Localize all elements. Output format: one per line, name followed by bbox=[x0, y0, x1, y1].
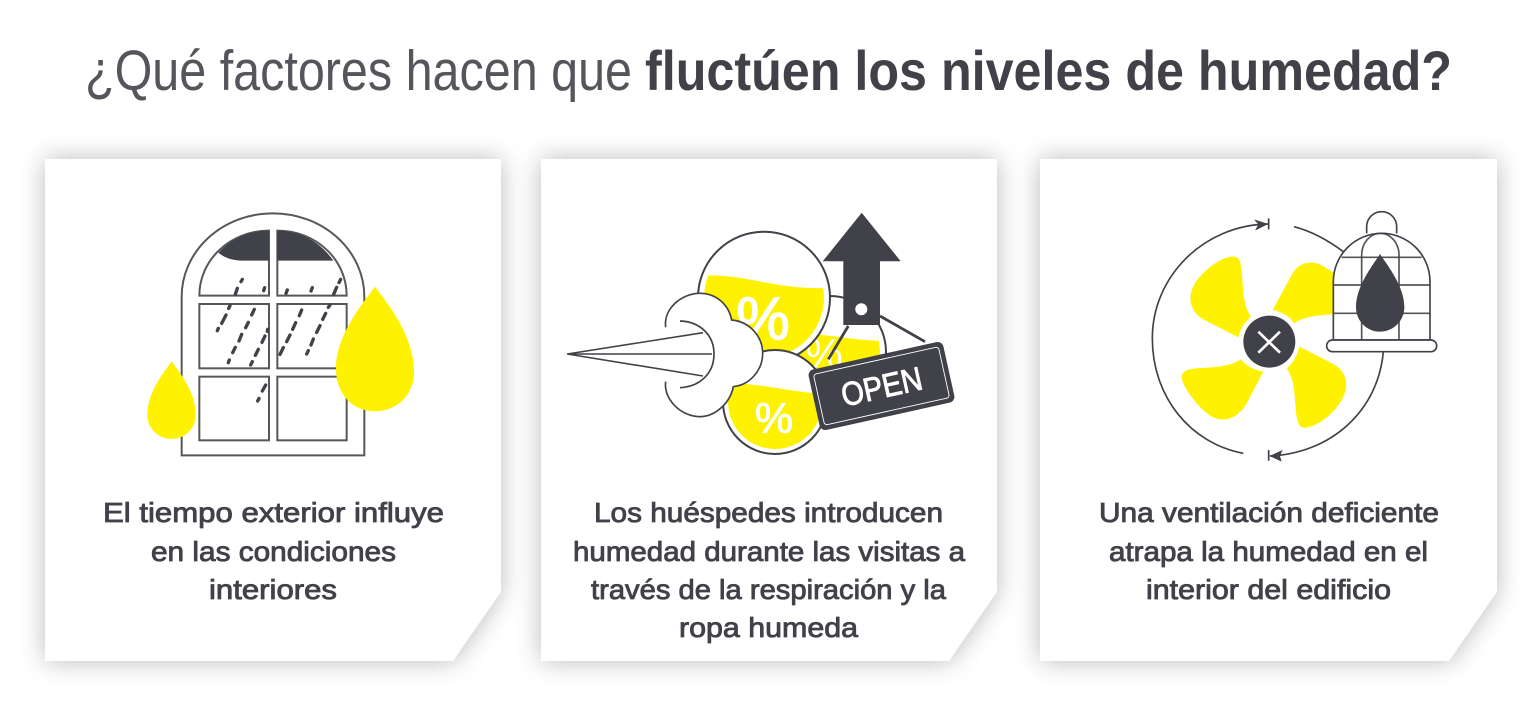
text: ventilation: interior del edificio bbox=[1146, 574, 1391, 605]
fan blades bbox=[1182, 257, 1346, 428]
icon: fan and caged drop bbox=[1152, 212, 1437, 462]
open sign: OPEN bbox=[838, 360, 926, 413]
text: outdoor weather: interiores bbox=[209, 574, 337, 605]
back circle bbox=[799, 295, 887, 369]
text: ventilation bbox=[1099, 497, 1439, 605]
icon: rainy window with drops bbox=[147, 213, 414, 455]
panel: outdoor weather bbox=[45, 159, 501, 661]
big circle bbox=[698, 232, 830, 364]
text: ventilation: atrapa la humedad en el bbox=[1109, 536, 1428, 567]
open sign bbox=[807, 341, 956, 431]
caged drop bbox=[1356, 254, 1404, 332]
bottom circle bbox=[723, 350, 827, 454]
sign strings bbox=[828, 316, 925, 359]
cloud bbox=[665, 293, 763, 417]
text: ventilation: Una ventilación deficiente bbox=[1099, 497, 1439, 528]
text: guests: través de la respiración y la bbox=[591, 574, 947, 605]
breath lines bbox=[567, 333, 712, 376]
big circle: % bbox=[736, 285, 790, 352]
title bbox=[85, 39, 1452, 103]
text: outdoor weather: El tiempo exterior influye bbox=[103, 497, 444, 528]
title: fluctúen los niveles de humedad? bbox=[645, 39, 1452, 102]
circular arrows bbox=[1152, 218, 1383, 462]
panel: ventilation bbox=[1040, 159, 1497, 661]
back circle: % bbox=[805, 330, 843, 377]
icon: humidity circles, breath and open sign bbox=[567, 213, 956, 454]
text: guests: ropa humeda bbox=[679, 612, 859, 643]
fan hub bbox=[1243, 316, 1295, 368]
panel: guests bbox=[541, 159, 997, 661]
arrow up bbox=[823, 213, 901, 325]
title: ¿Qué factores hacen que bbox=[85, 39, 632, 103]
text: outdoor weather: en las condiciones bbox=[151, 536, 396, 567]
text: guests bbox=[573, 497, 966, 643]
text: outdoor weather bbox=[103, 497, 444, 605]
text: guests: humedad durante las visitas a bbox=[573, 536, 966, 567]
cage bbox=[1327, 212, 1437, 352]
bottom circle: % bbox=[755, 395, 793, 443]
text: guests: Los huéspedes introducen bbox=[594, 497, 943, 528]
